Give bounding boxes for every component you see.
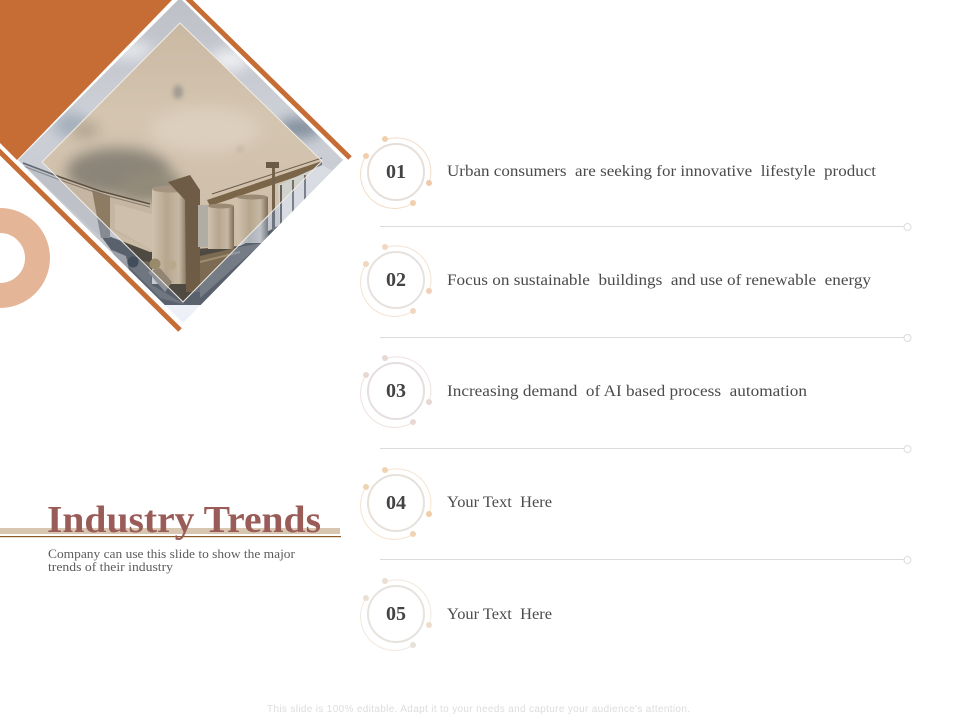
- title: Industry Trends: [47, 499, 321, 541]
- badge 04: 04: [386, 492, 406, 514]
- badge 02: 02: [386, 269, 406, 291]
- description text: trends of their industry: [48, 560, 174, 574]
- badge 03: 03: [386, 380, 406, 402]
- description text: Company can use this slide to show the major: [48, 547, 296, 561]
- item 03: [361, 355, 807, 427]
- text 03: Increasing demand of AI based process automation: [447, 383, 807, 400]
- photo inner diamond: [42, 22, 322, 303]
- orange diagonal line upper right: [187, 0, 350, 158]
- badge 04: [361, 467, 432, 539]
- footer note: This slide is 100% editable. Adapt it to your needs and capture your audience's attention.: [267, 704, 690, 715]
- divider 04: [380, 556, 911, 564]
- text 01: Urban consumers are seeking for innovative lifestyle product: [447, 163, 877, 180]
- item 01: [361, 136, 877, 208]
- badge 05: [361, 578, 432, 650]
- text 02: Focus on sustainable buildings and use of renewable energy: [447, 272, 871, 289]
- divider 03: [380, 446, 911, 452]
- description text: [48, 547, 296, 574]
- badge 03: [361, 355, 432, 427]
- orange corner shape: [0, 0, 172, 160]
- badge 02: [361, 244, 432, 316]
- divider 02: [380, 334, 911, 342]
- badge 01: [361, 136, 432, 208]
- photo frame diamond: [18, 0, 343, 323]
- peach ring: [0, 220, 38, 296]
- orange diagonal line lower left: [0, 150, 180, 330]
- item 04: [361, 467, 552, 539]
- badge 01: 01: [386, 161, 406, 183]
- divider 01: [380, 224, 911, 230]
- text 05: Your Text Here: [447, 606, 552, 623]
- item 05: [361, 578, 552, 650]
- item 02: [361, 244, 871, 316]
- text 04: Your Text Here: [447, 494, 552, 511]
- badge 05: 05: [386, 603, 406, 625]
